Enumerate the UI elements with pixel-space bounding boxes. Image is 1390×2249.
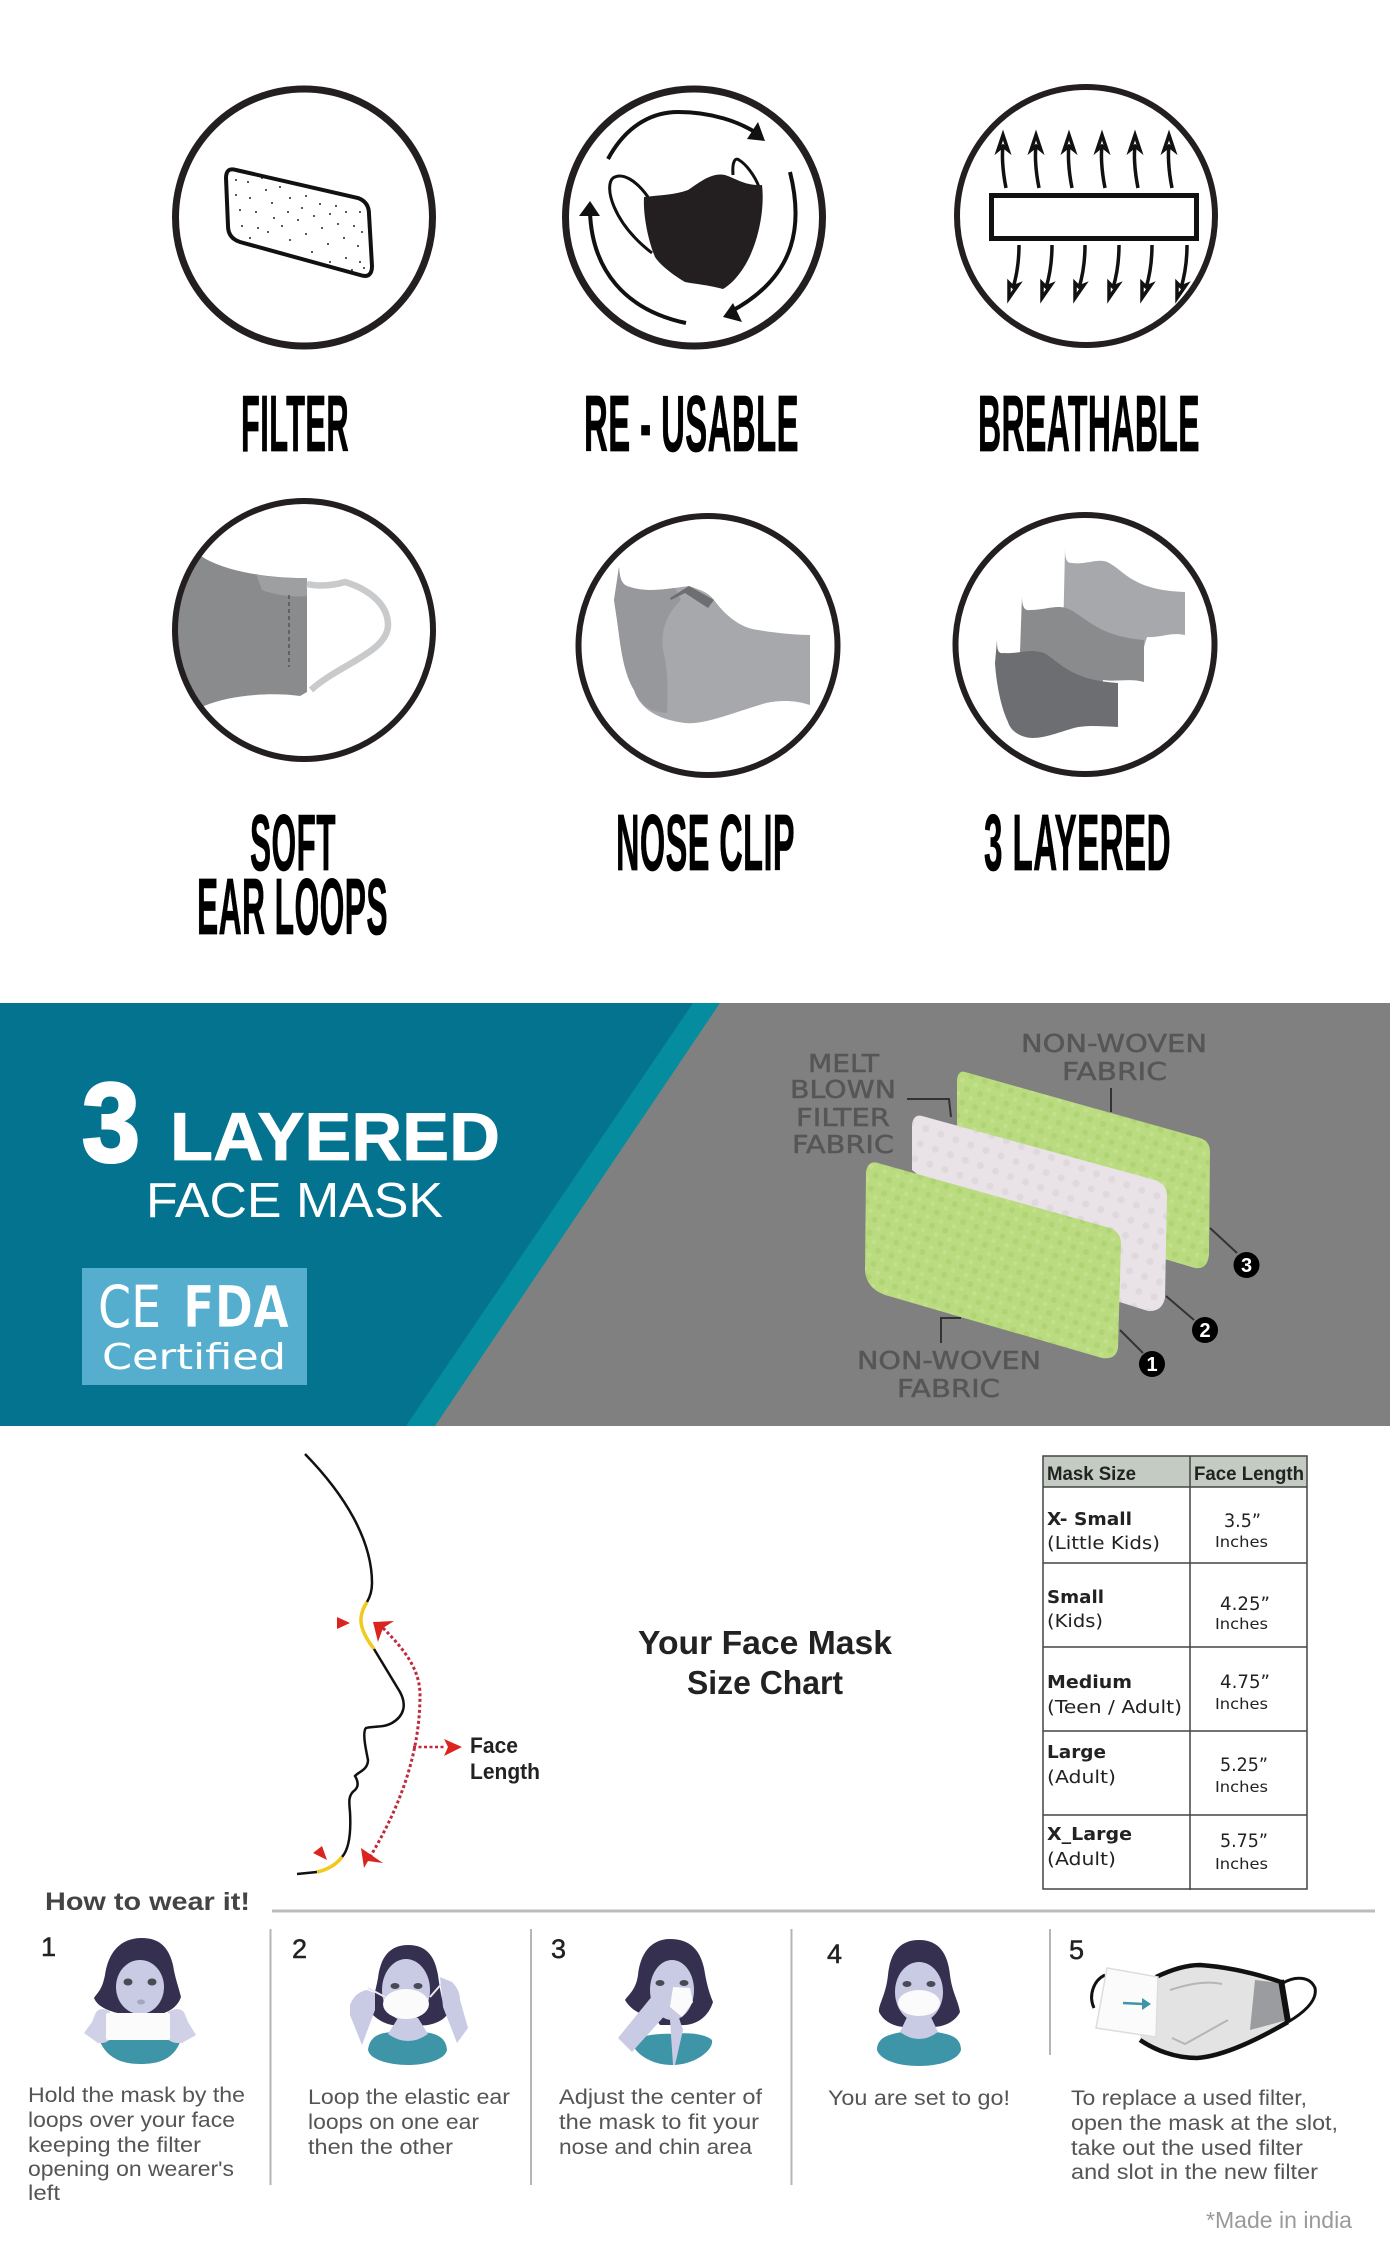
diagram: fabric layers: 3 (1241, 1255, 1252, 1277)
diagram: face profile with face length (297, 1454, 540, 1874)
banner title: FACE MASK (146, 1174, 443, 1228)
step 2 text (308, 2086, 510, 2159)
table: mask sizes: Inches (1215, 1855, 1268, 1873)
labels: fabric names (790, 1029, 1207, 1403)
step 3 text: Adjust the center of (559, 2086, 762, 2109)
badge: CE FDA certified: CE (98, 1273, 161, 1341)
labels: fabric names: BLOWN (790, 1075, 896, 1104)
panel: feature icons: EAR LOOPS (197, 862, 388, 951)
panel: how to wear it (28, 1888, 1375, 2205)
step 3 text: nose and chin area (559, 2136, 752, 2159)
step 4: 4 (827, 1939, 842, 1969)
table: mask sizes: 4.25” (1220, 1593, 1270, 1615)
step 2 text: then the other (308, 2136, 453, 2159)
labels: fabric names: FABRIC (897, 1374, 1000, 1403)
step 1 text: left (28, 2182, 60, 2205)
table: mask sizes: Inches (1215, 1778, 1268, 1796)
step 2 text: loops on one ear (308, 2111, 479, 2134)
step 1 text: Hold the mask by the (28, 2084, 245, 2107)
table: mask sizes: 3.5” (1224, 1510, 1261, 1532)
label: soft ear loops: SOFT (250, 798, 336, 887)
footnote: made in india: *Made in india (1206, 2207, 1352, 2233)
table: mask sizes (1043, 1456, 1307, 1890)
step 5 (1069, 1935, 1338, 2184)
table: mask sizes: Inches (1215, 1533, 1268, 1551)
panel: feature icons: FILTER (241, 379, 349, 468)
table: mask sizes: 4.75” (1220, 1671, 1270, 1693)
label: soft ear loops (197, 798, 388, 951)
diagram: fabric layers: 1 (1146, 1354, 1158, 1376)
table: mask sizes: (Little Kids) (1047, 1533, 1160, 1554)
badge: CE FDA certified: FDA (183, 1273, 289, 1341)
step 4 text: You are set to go! (828, 2087, 1010, 2110)
table: mask sizes: Small (1047, 1587, 1104, 1608)
icon: reusable mask (566, 89, 822, 346)
illustration: woman adjusting mask (618, 1939, 713, 2065)
step 2: 2 (292, 1934, 307, 1964)
step 3 text (559, 2086, 762, 2159)
step 5 text: To replace a used filter, (1071, 2087, 1307, 2110)
table: mask sizes: 5.75” (1220, 1830, 1268, 1852)
step 1 text: keeping the filter (28, 2134, 201, 2157)
step 5 text (1071, 2087, 1338, 2184)
table: mask sizes: Inches (1215, 1615, 1268, 1633)
table: mask sizes: (Kids) (1047, 1611, 1103, 1632)
table: mask sizes: (Teen / Adult) (1047, 1697, 1182, 1718)
panel: feature icons (170, 87, 1215, 951)
step 3: 3 (551, 1934, 566, 1964)
badge: CE FDA certified: Certified (102, 1337, 286, 1378)
step 3 (551, 1934, 762, 2159)
step 1 text: opening on wearer's (28, 2158, 234, 2181)
illustration: mask with filter slot (1092, 1965, 1315, 2058)
labels: fabric names: FABRIC (1062, 1057, 1167, 1086)
step 5 text: take out the used filter (1071, 2137, 1303, 2160)
icon: filter (176, 89, 432, 346)
step 5 text: open the mask at the slot, (1071, 2112, 1338, 2135)
diagram: face profile with face length: Face (470, 1733, 518, 1758)
table: mask sizes: 5.25” (1220, 1754, 1268, 1776)
panel: 3 layered banner (0, 1003, 1390, 1426)
illustration: woman wearing mask (877, 1940, 961, 2066)
illustration: woman looping ear straps (350, 1945, 468, 2065)
table: mask sizes: Medium (1047, 1672, 1132, 1693)
table: mask sizes: (Adult) (1047, 1849, 1116, 1870)
banner title: 3 (82, 1060, 140, 1185)
icon: soft ear loops (170, 501, 433, 759)
panel: feature icons: NOSE CLIP (616, 798, 795, 887)
step 1 text: loops over your face (28, 2109, 235, 2132)
table: mask sizes: Large (1047, 1742, 1106, 1763)
badge: CE FDA certified (82, 1268, 307, 1385)
icon: nose clip (578, 516, 838, 775)
illustration: woman holding mask (84, 1938, 196, 2064)
step 1: 1 (41, 1932, 56, 1962)
table: mask sizes: (Adult) (1047, 1767, 1116, 1788)
diagram: fabric layers: 2 (1199, 1320, 1211, 1342)
diagram: face profile with face length: Length (470, 1759, 540, 1784)
icon: breathable (957, 87, 1215, 345)
step 5: 5 (1069, 1935, 1084, 1965)
icon: three layers (956, 515, 1214, 774)
banner title: LAYERED (170, 1099, 500, 1175)
labels: fabric names: NON-WOVEN (1021, 1029, 1207, 1058)
diagram: fabric layers (865, 1072, 1260, 1377)
step 4 (827, 1939, 1010, 2110)
labels: fabric names: MELT (808, 1049, 880, 1078)
table: mask sizes: X- Small (1047, 1509, 1132, 1530)
step 3 text: the mask to fit your (559, 2111, 759, 2134)
step 2 (292, 1934, 510, 2159)
table: mask sizes: Inches (1215, 1695, 1268, 1713)
heading: size chart: Your Face Mask (638, 1624, 893, 1661)
banner title (82, 1060, 500, 1228)
labels: fabric names: FABRIC (792, 1130, 894, 1159)
heading: size chart (638, 1624, 893, 1701)
table: mask sizes: X_Large (1047, 1824, 1132, 1845)
step 1 text (28, 2084, 245, 2205)
step 1 (28, 1932, 245, 2205)
heading: how to wear it: How to wear it! (45, 1888, 250, 1916)
step 2 text: Loop the elastic ear (308, 2086, 510, 2109)
heading: size chart: Size Chart (687, 1664, 843, 1701)
panel: feature icons: RE - USABLE (584, 379, 799, 468)
step 5 text: and slot in the new filter (1071, 2161, 1318, 2184)
labels: fabric names: FILTER (796, 1103, 890, 1132)
labels: fabric names: NON-WOVEN (857, 1346, 1041, 1375)
table: mask sizes: Mask Size (1047, 1464, 1136, 1485)
table: mask sizes: Face Length (1194, 1464, 1304, 1485)
